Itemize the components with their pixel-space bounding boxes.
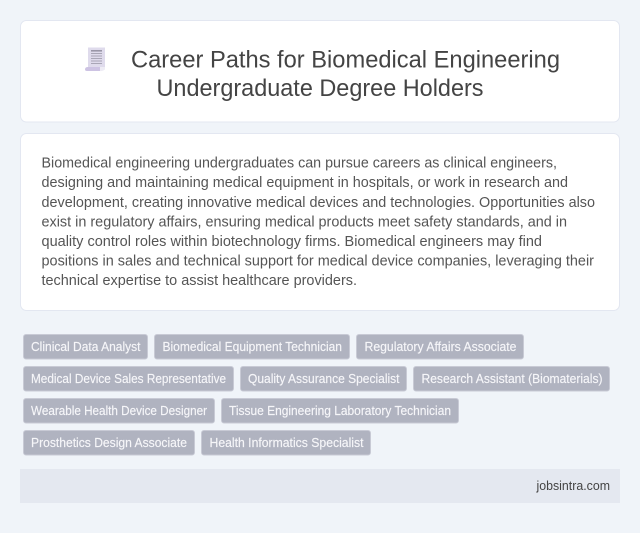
tag: Regulatory Affairs Associate: Regulatory Affairs Associate [364,340,517,354]
text block: description: exist in regulatory affairs, ensuring medical products meet safety standards, and in [42,214,567,230]
tag: Medical Device Sales Representative [24,366,234,391]
tag: Tissue Engineering Laboratory Technician [222,398,458,423]
title [131,46,560,102]
panel: description [20,134,620,310]
panel: header [20,20,620,122]
footer [20,469,620,503]
footer: jobsintra.com [536,479,610,493]
tag: Clinical Data Analyst: Clinical Data Analyst [31,340,141,354]
title: Career Paths for Biomedical Engineering [131,46,560,74]
tag: Health Informatics Specialist: Health Informatics Specialist [210,436,364,450]
tag: Biomedical Equipment Technician: Biomedical Equipment Technician [162,340,342,354]
tag: Regulatory Affairs Associate [356,334,524,359]
tag: Wearable Health Device Designer: Wearable Health Device Designer [31,404,207,418]
tags: career paths [24,334,610,455]
tag: Clinical Data Analyst [24,334,148,359]
icon: scroll document [85,48,105,71]
text block: description: development, creating innovative medical devices and technologies. Opportunities also [42,195,595,211]
text block: description: quality control roles within biotechnology firms. Biomedical engineers may find [42,234,542,250]
tag: Health Informatics Specialist [202,430,370,455]
tag: Biomedical Equipment Technician [154,334,350,359]
tag: Research Assistant (Biomaterials): Research Assistant (Biomaterials) [422,372,602,386]
tag: Quality Assurance Specialist: Quality Assurance Specialist [248,372,400,386]
tag: Research Assistant (Biomaterials) [414,366,610,391]
tag: Quality Assurance Specialist [240,366,406,391]
tag: Wearable Health Device Designer [24,398,214,423]
tag: Prosthetics Design Associate [24,430,194,455]
tag: Prosthetics Design Associate: Prosthetics Design Associate [31,436,187,450]
tag: Medical Device Sales Representative: Medical Device Sales Representative [31,372,226,386]
text block: description: designing and maintaining medical equipment in hospitals, or work in research and [42,175,568,191]
text block: description [42,156,595,289]
title: Undergraduate Degree Holders [156,75,484,102]
text block: description: positions in sales and technical support for medical device companies, leveraging their [42,254,594,270]
text block: description: Biomedical engineering undergraduates can pursue careers as clinical engineers, [42,156,557,172]
text block: description: technical expertise to assist healthcare providers. [42,273,357,289]
tag: Tissue Engineering Laboratory Technician: Tissue Engineering Laboratory Technician [229,404,451,418]
